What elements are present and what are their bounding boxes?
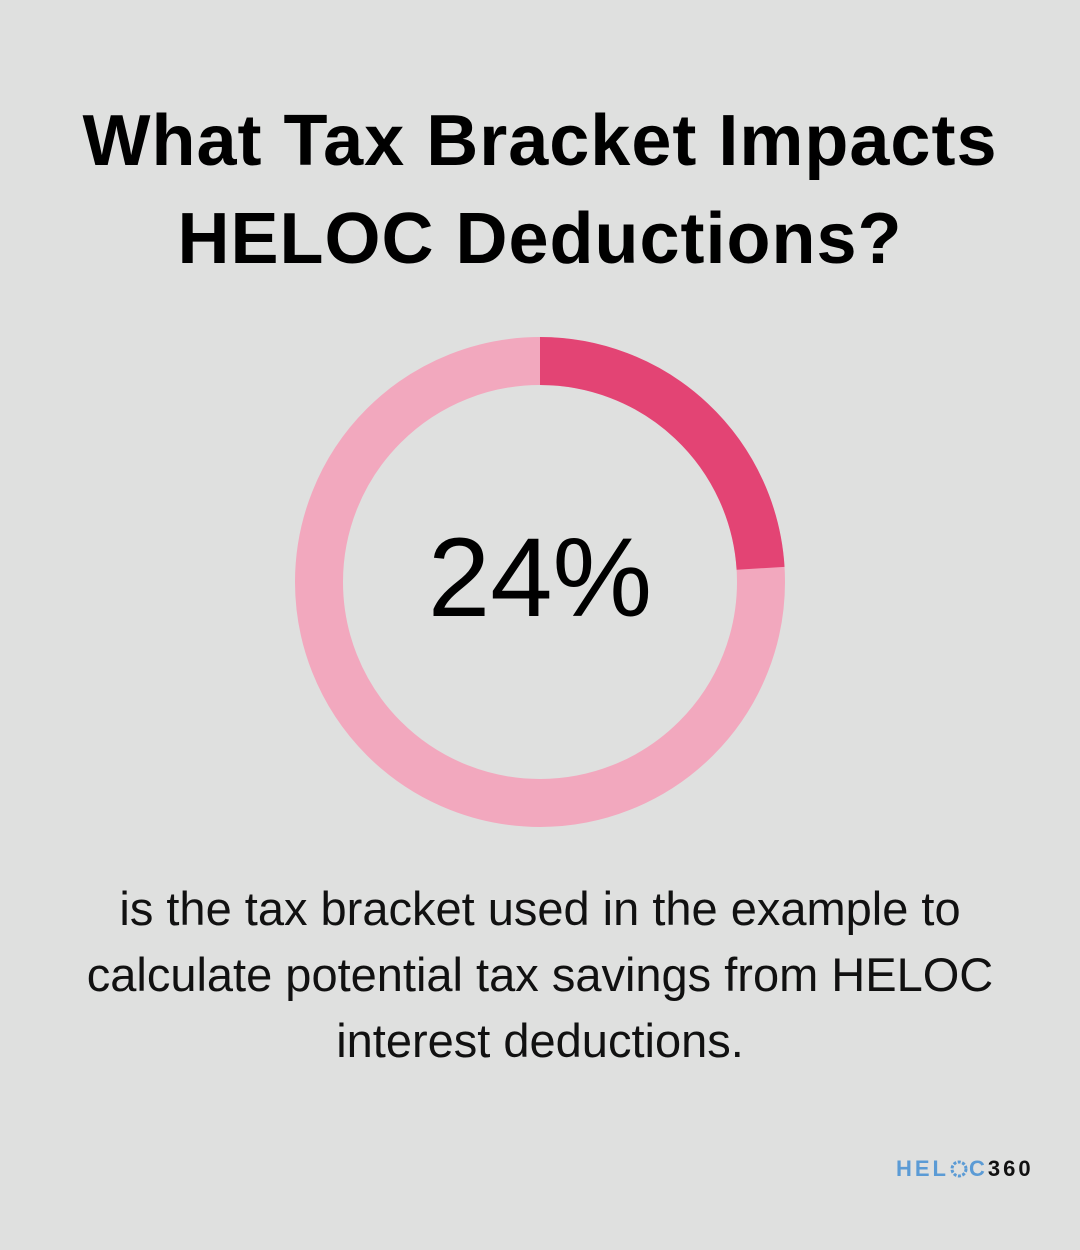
logo: HEL C360 — [896, 1156, 1034, 1181]
description text: is the tax bracket used in the example to calculate potential tax savings from HELOC interest deductions. — [87, 882, 993, 1067]
title: HELOC Deductions? — [177, 199, 902, 279]
title — [82, 101, 997, 279]
donut chart — [295, 337, 785, 827]
title: What Tax Bracket Impacts — [83, 101, 997, 181]
donut chart: 24% — [428, 515, 652, 640]
